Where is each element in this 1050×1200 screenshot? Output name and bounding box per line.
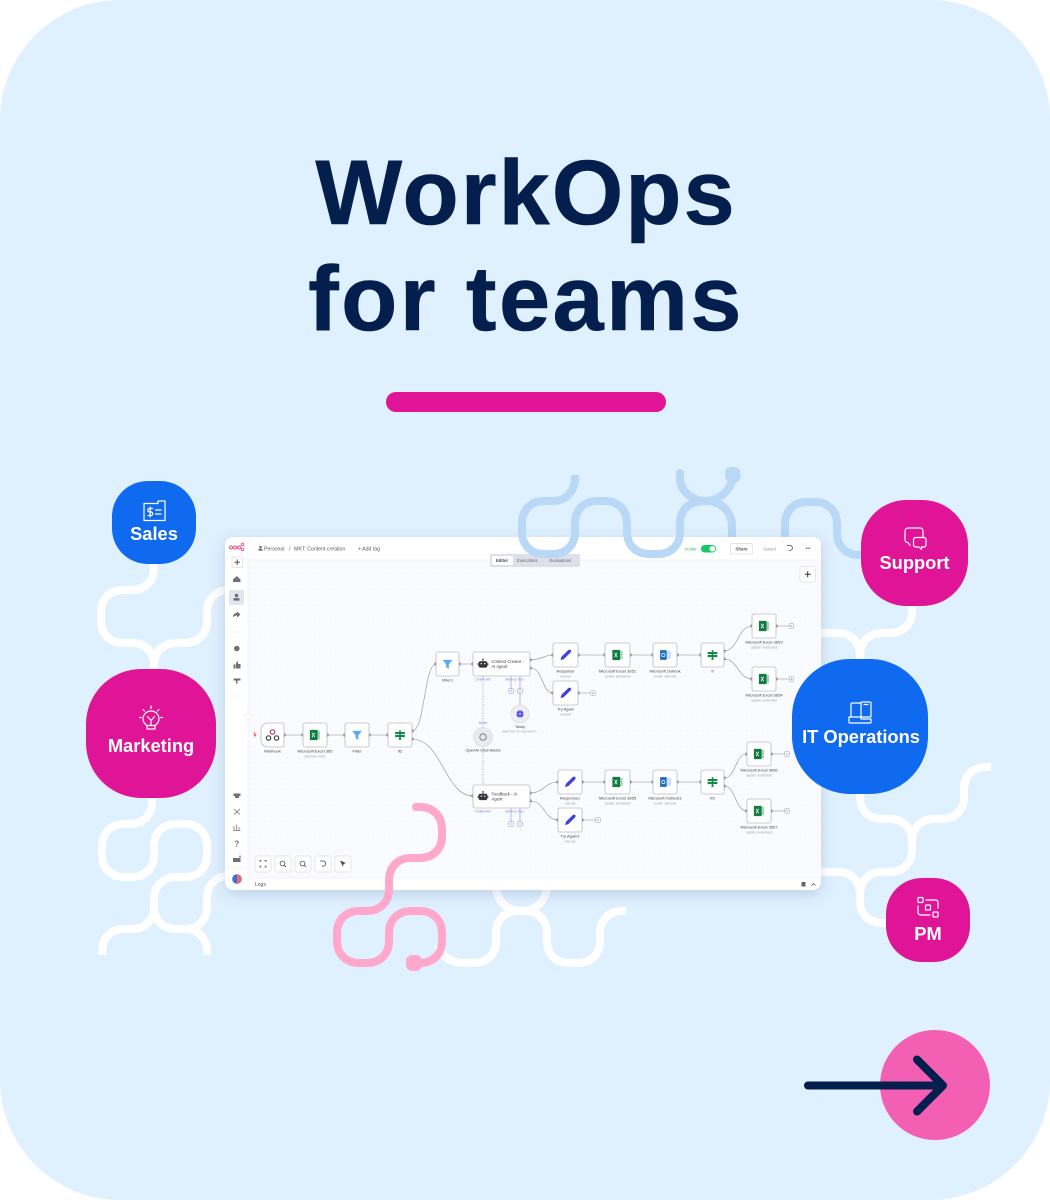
node: Microsoft Outlook1: create: calendar xyxy=(654,802,677,806)
node: Microsoft Excel 3657 xyxy=(740,799,778,834)
title: for teams xyxy=(308,248,744,350)
sidebar xyxy=(229,543,251,884)
node: Microsoft Excel 3653 xyxy=(745,614,783,650)
header bar: MKT: Content creation xyxy=(294,547,345,553)
node: Response1 xyxy=(558,770,582,806)
header bar: Editor xyxy=(496,558,508,563)
panel frame xyxy=(225,537,821,890)
icon: laptop and phone xyxy=(849,702,871,723)
node: Response: manual xyxy=(560,674,571,678)
node: Microsoft Excel 3656: update: worksheet xyxy=(746,774,772,778)
connector paths: light blue, behind screenshot xyxy=(680,473,868,555)
node: Microsoft Outlook xyxy=(649,643,681,678)
node: Microsoft Excel 3655: update: worksheet xyxy=(604,802,631,806)
node: Tavily xyxy=(502,705,538,734)
node: Microsoft Excel 3651: Microsoft Excel 3651 xyxy=(599,668,637,674)
header bar: Share xyxy=(735,547,748,552)
node: Try Again: manual xyxy=(560,712,571,716)
arrow xyxy=(808,1060,943,1112)
header bar: Saved xyxy=(763,547,776,552)
node: Content Creator AI Agent xyxy=(473,652,530,682)
node: Microsoft Excel 3656: Microsoft Excel 3656 xyxy=(740,768,778,772)
node: Microsoft Excel 3656 xyxy=(740,742,778,778)
node: Microsoft Excel 3657: Microsoft Excel 3657 xyxy=(740,824,778,830)
node: Tavily: Searches for a general t... xyxy=(502,730,538,734)
icon: workflow squares xyxy=(918,898,938,917)
node: Microsoft Excel 3655 xyxy=(599,770,637,806)
connector path: pink, over screenshot xyxy=(337,807,442,971)
node: Content Creator AI Agent: Memory xyxy=(505,678,517,682)
next-arrow button xyxy=(808,1030,990,1140)
badge: Support xyxy=(861,500,968,606)
node: Webhook xyxy=(261,723,284,754)
badge: Marketing xyxy=(86,669,216,798)
canvas xyxy=(248,560,821,878)
badge: Sales: Sales xyxy=(130,523,178,544)
badge: PM: PM xyxy=(914,923,942,944)
logs bar: Logs xyxy=(255,882,266,888)
sidebar: ? xyxy=(234,840,239,848)
header bar xyxy=(258,544,816,582)
badge: IT Operations xyxy=(792,659,928,794)
node: If: If xyxy=(711,668,714,674)
title: WorkOps xyxy=(315,142,737,244)
node: Microsoft Excel 365 xyxy=(298,723,333,758)
badge: Marketing: Marketing xyxy=(108,735,194,756)
node: Microsoft Excel 3653: Microsoft Excel 3653 xyxy=(745,640,783,644)
node: Response1: Response1 xyxy=(560,796,581,800)
node: If3 xyxy=(701,770,724,800)
node: Microsoft Excel 3653: update: worksheet xyxy=(751,646,777,650)
node: Microsoft Excel 3657: update: worksheet xyxy=(746,830,772,834)
icon: price tag xyxy=(144,501,165,520)
node: Filter: Filter xyxy=(353,748,362,754)
node: OpenAI Chat Model: OpenAI Chat Model xyxy=(465,748,501,752)
node: Content Creator AI Agent: Content Creator - xyxy=(492,659,524,664)
node: Content Creator AI Agent: ChatModel* xyxy=(475,678,492,682)
workflow connections xyxy=(254,624,794,826)
active toggle: Active xyxy=(684,547,697,552)
node: Microsoft Outlook1: Microsoft Outlook1 xyxy=(648,796,682,800)
node: Feedback AI Agent: Agent xyxy=(492,796,503,802)
node: Tavily: Tavily xyxy=(515,724,525,729)
node: Filter1 xyxy=(436,652,459,682)
badge: Support: Support xyxy=(879,552,950,573)
badge: Sales xyxy=(112,481,196,564)
node: Filter1: Filter1 xyxy=(442,678,454,682)
tabs xyxy=(490,554,580,567)
logo xyxy=(230,543,244,551)
node: Try Again1: Try Again1 xyxy=(561,834,580,838)
header bar: Executions xyxy=(517,558,537,563)
node: OpenAI Chat Model xyxy=(465,721,501,752)
badge: IT Operations: IT Operations xyxy=(802,726,920,747)
node: Microsoft Excel 365: get/rows: table xyxy=(305,754,326,758)
node: Feedback AI Agent: Memory xyxy=(505,810,517,814)
header bar: + Add tag xyxy=(358,547,380,553)
node: Try Again1 xyxy=(558,808,582,844)
node: If3: If3 xyxy=(710,796,715,800)
node: Microsoft Outlook1 xyxy=(648,770,682,806)
title xyxy=(308,142,744,350)
node: Feedback AI Agent: ChatModel* xyxy=(475,810,492,814)
workflow editor screenshot xyxy=(225,537,821,890)
node: If xyxy=(701,643,724,674)
node: Microsoft Excel 3654: update: worksheet xyxy=(751,698,777,702)
header bar: Personal xyxy=(264,547,284,553)
circle xyxy=(880,1030,990,1140)
node: If2: If2 xyxy=(398,748,403,754)
node: Webhook: Webhook xyxy=(264,748,281,754)
node: Microsoft Excel 3655: Microsoft Excel 3655 xyxy=(599,796,637,800)
node: Microsoft Excel 3651 xyxy=(599,643,637,678)
node: Microsoft Excel 3654: Microsoft Excel 3654 xyxy=(745,692,783,698)
node: Feedback AI Agent: Tool xyxy=(518,810,524,814)
node: Content Creator AI Agent: Tool xyxy=(518,678,524,682)
connector path: light blue, over screenshot xyxy=(522,467,740,554)
node: Filter xyxy=(345,723,369,754)
badge: PM xyxy=(886,878,970,962)
icon: chat bubbles xyxy=(905,528,926,550)
node: Feedback AI Agent xyxy=(473,785,530,814)
node: Feedback AI Agent: Feedback - AI xyxy=(492,792,517,796)
node: Response: Response xyxy=(556,668,575,674)
node: Response1: manual xyxy=(565,802,576,806)
node: Microsoft Excel 3651: update: worksheet xyxy=(604,674,631,678)
icon: light bulb xyxy=(140,706,162,729)
header bar: / xyxy=(289,547,291,553)
node: Microsoft Excel 365: Microsoft Excel 365 xyxy=(298,748,333,754)
node: Microsoft Excel 3654 xyxy=(745,667,783,702)
node: Response xyxy=(553,643,578,678)
connector paths: white, behind screenshot xyxy=(101,560,991,963)
header bar: Evaluations xyxy=(550,558,571,563)
title underline xyxy=(386,392,666,412)
node: Microsoft Outlook: Microsoft Outlook xyxy=(649,668,681,674)
node: Try Again xyxy=(553,681,578,716)
node: Content Creator AI Agent: AI Agent xyxy=(492,664,508,669)
node: If2 xyxy=(388,723,412,754)
logs bar xyxy=(255,882,816,888)
node: Try Again: Try Again xyxy=(557,706,574,712)
node: Try Again1: manual xyxy=(565,840,576,844)
node: Microsoft Outlook: create: calendar xyxy=(654,674,677,678)
user avatar xyxy=(232,874,242,884)
node: OpenAI Chat Model: Model xyxy=(479,721,488,725)
zoom controls toolbar xyxy=(255,856,351,872)
